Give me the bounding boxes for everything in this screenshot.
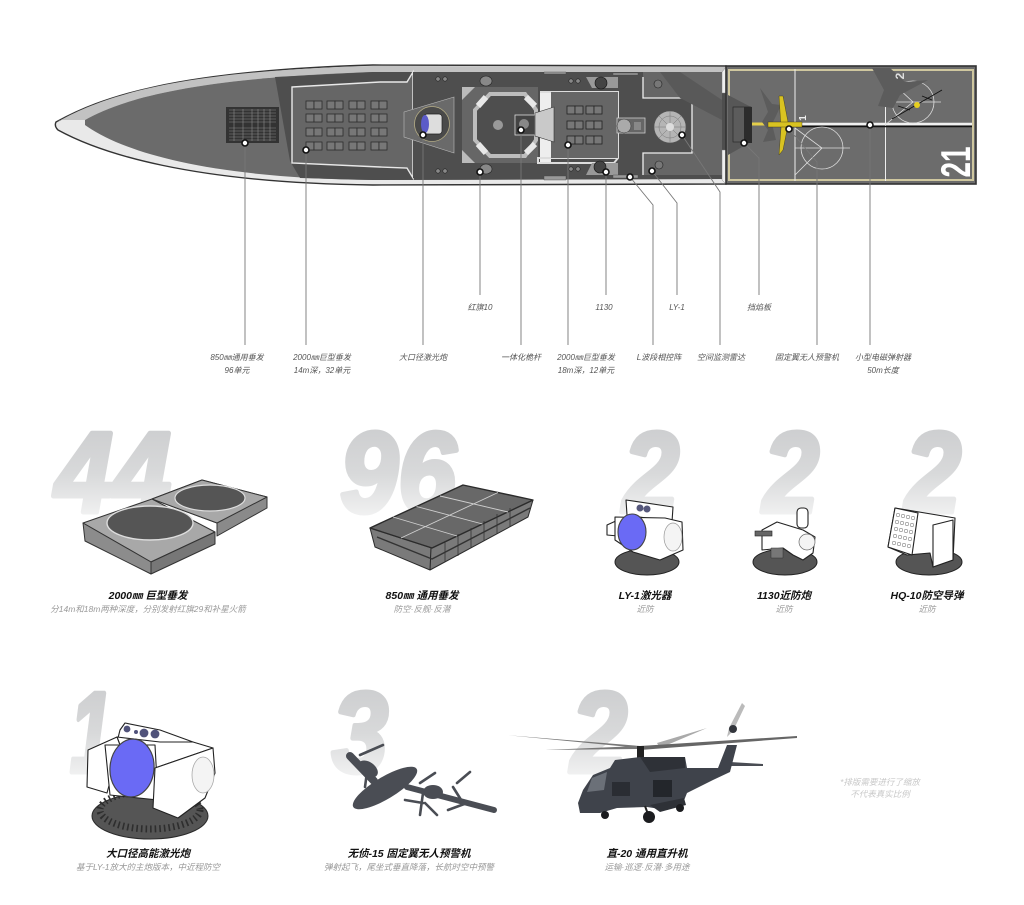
title: HQ-10防空导弹 xyxy=(891,589,965,602)
icon: HQ-10 launcher xyxy=(888,508,962,575)
item: 2000mm VLS xyxy=(50,410,267,614)
subtitle: 近防 xyxy=(918,604,937,614)
item: LY-1 laser xyxy=(607,410,683,614)
icon: helicopter xyxy=(505,703,797,823)
flight deck xyxy=(726,66,979,184)
item: 1130 CIWS xyxy=(753,410,819,614)
2000mm cells forward xyxy=(306,101,387,150)
number 1: 1 xyxy=(70,670,112,797)
label: 1130: 1130 xyxy=(595,303,613,312)
parked UAV shadow xyxy=(760,88,781,142)
number 2: 2 xyxy=(761,410,819,537)
label: 2000 VLS aft: 18m深，12单元 xyxy=(558,366,615,375)
title: 1130近防炮 xyxy=(757,590,813,602)
subtitle: 近防 xyxy=(636,604,655,614)
item: Z-20 helicopter xyxy=(505,670,797,872)
number 2: 2 xyxy=(621,410,679,537)
subtitle: 分14m和18m两种深度，分别发射红旗29和补星火箭 xyxy=(50,604,247,614)
subtitle: 近防 xyxy=(775,604,794,614)
label: fixed-wing UAV: 固定翼无人预警机 xyxy=(775,353,840,362)
title: 直-20 通用直升机 xyxy=(606,848,688,860)
integrated mast block xyxy=(462,87,538,163)
label: blast deflector: 挡焰板 xyxy=(747,303,772,312)
icon: LY-1 turret xyxy=(607,500,683,575)
label: mast: 一体化桅杆 xyxy=(501,353,543,362)
item: large laser xyxy=(70,670,222,872)
flight deck: 2 xyxy=(893,72,907,79)
icon: 1130 gun xyxy=(753,508,817,575)
number 44: 44 xyxy=(53,410,171,537)
callout labels xyxy=(210,303,912,375)
label: 850 VLS: 96单元 xyxy=(225,366,250,375)
label: 2000 VLS aft: 2000㎜巨型垂发 xyxy=(556,353,616,362)
deck numbers: 1 xyxy=(798,115,809,121)
forward vertical launch panel xyxy=(292,72,413,178)
icon: 2000mm launch cells xyxy=(83,480,267,574)
number 96: 96 xyxy=(340,410,457,537)
1130 close-in guns xyxy=(586,77,618,175)
title: 850㎜ 通用垂发 xyxy=(386,590,460,602)
title: 无侦-15 固定翼无人预警机 xyxy=(347,847,471,860)
laser alcove xyxy=(404,97,454,153)
icon: 850mm launcher xyxy=(370,485,533,570)
label: large laser: 大口径激光炮 xyxy=(399,353,448,362)
title: 2000㎜ 巨型垂发 xyxy=(108,590,189,602)
aft bulkhead xyxy=(722,66,727,184)
subtitle: 弹射起飞，尾坐式垂直降落，长航时空中预警 xyxy=(324,862,495,872)
item: 850mm VLS xyxy=(340,410,533,614)
flight deck: 21 xyxy=(932,146,979,178)
label: L-band: L波段相控阵 xyxy=(637,353,683,362)
850mm launcher array xyxy=(226,107,279,143)
label: HQ-10: 红旗10 xyxy=(468,303,493,312)
helicopter markings xyxy=(892,90,942,119)
label: 2000 VLS forward: 14m深，32单元 xyxy=(294,366,351,375)
number 2: 2 xyxy=(569,670,627,797)
HQ-10 launchers xyxy=(436,76,580,174)
number 3: 3 xyxy=(332,670,388,797)
icon: UAV xyxy=(348,745,494,816)
title: LY-1激光器 xyxy=(619,590,673,602)
scale note: *排版需要进行了缩放 xyxy=(840,777,921,787)
subtitle: 防空·反舰·反潜 xyxy=(394,604,452,614)
label: EM catapult: 50m长度 xyxy=(867,366,901,375)
aft deck and space surveillance radar xyxy=(643,72,722,175)
aft vertical launch panel xyxy=(538,92,618,164)
icon: large laser turret xyxy=(87,723,215,839)
label: space radar: 空间监测雷达 xyxy=(697,353,746,362)
ship top-down plan xyxy=(55,65,979,185)
main deck xyxy=(85,72,726,180)
jet blast deflector xyxy=(733,107,752,143)
CIWS mount on aft deckhouse xyxy=(617,118,645,133)
callout leader lines xyxy=(242,122,873,345)
item: WZ-15 UAV xyxy=(324,670,495,872)
yellow UAV on deck xyxy=(768,96,802,155)
label: 850 VLS: 850㎜通用垂发 xyxy=(210,353,265,362)
subtitle: 运输·巡逻·反潜·多用途 xyxy=(604,862,691,872)
L-band phased array strips xyxy=(544,72,638,180)
label: EM catapult: 小型电磁弹射器 xyxy=(855,353,912,362)
subtitle: 基于LY-1放大的主炮版本，中近程防空 xyxy=(76,862,222,872)
item: HQ-10 xyxy=(888,410,965,614)
hull outline xyxy=(55,65,726,185)
label: 2000 VLS forward: 2000㎜巨型垂发 xyxy=(292,353,352,362)
title: 大口径高能激光炮 xyxy=(106,848,191,860)
mast base wedge xyxy=(535,107,554,142)
dark superstructure band xyxy=(275,72,726,180)
number 2: 2 xyxy=(903,410,961,537)
label: LY-1: LY-1 xyxy=(669,303,685,312)
scale note: 不代表真实比例 xyxy=(850,789,911,799)
